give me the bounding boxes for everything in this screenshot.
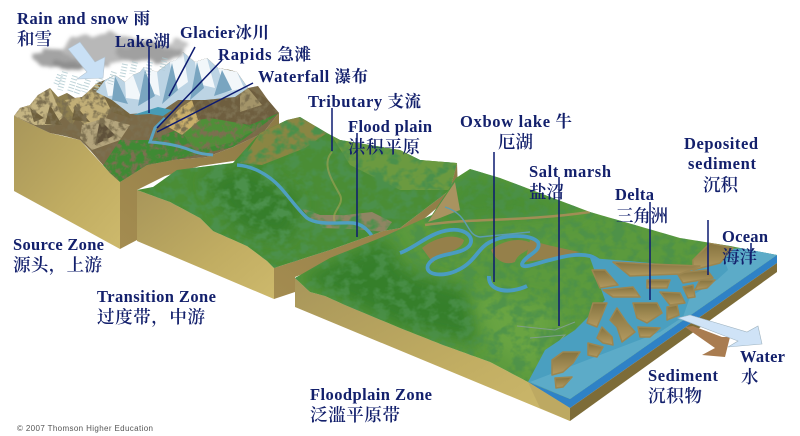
label: floodplain zone bbox=[310, 385, 432, 425]
label: source zone: 源头，上游 bbox=[13, 255, 102, 276]
tan and dark right mountains bbox=[165, 88, 279, 135]
label: oxbow lake: Oxbow lake 牛 bbox=[460, 112, 572, 131]
label: sediment bbox=[648, 366, 718, 406]
label: rain and snow: 和雪 bbox=[17, 29, 52, 49]
label: water: 水 bbox=[741, 367, 759, 387]
transition zone terrain bbox=[137, 117, 457, 268]
block: transition zone bbox=[130, 110, 470, 299]
ocean bbox=[530, 248, 777, 399]
label: source zone: Source Zone bbox=[13, 235, 104, 254]
leader lines bbox=[149, 47, 751, 326]
label: sediment: Sediment bbox=[648, 366, 718, 385]
snow peaks bbox=[96, 52, 248, 114]
label: floodplain zone: Floodplain Zone bbox=[310, 385, 432, 404]
label: tributary: Tributary 支流 bbox=[308, 91, 422, 111]
green valley bbox=[100, 112, 279, 182]
label: ocean bbox=[722, 227, 768, 267]
source zone terrain bbox=[14, 52, 279, 182]
copyright: © 2007 Thomson Higher Education bbox=[17, 424, 153, 433]
lake bbox=[133, 107, 172, 116]
label: rain and snow: Rain and snow 雨 bbox=[17, 9, 150, 28]
source stream bbox=[150, 118, 213, 155]
label: source zone bbox=[13, 235, 104, 276]
meandering river bbox=[400, 230, 606, 274]
floodplain terrain bbox=[295, 169, 777, 399]
label: transition zone bbox=[97, 287, 216, 328]
label: ocean: Ocean bbox=[722, 227, 768, 246]
label: salt marsh bbox=[529, 162, 611, 202]
label: transition zone: 过度带，中游 bbox=[97, 307, 206, 328]
label: deposited sediment bbox=[684, 134, 758, 195]
rain and snow bbox=[56, 58, 165, 95]
block: floodplain zone bbox=[290, 160, 790, 421]
label: waterfall: Waterfall 瀑布 bbox=[258, 67, 368, 86]
label: deposited sediment: Deposited bbox=[684, 134, 758, 153]
label: salt marsh: 盐沼 bbox=[529, 182, 564, 202]
tributary stream bbox=[445, 207, 530, 237]
label: delta bbox=[615, 185, 668, 226]
label: rapids: Rapids 急滩 bbox=[218, 45, 312, 64]
delta water bbox=[528, 248, 777, 399]
label: delta: 三角洲 bbox=[616, 206, 668, 226]
meander sediment bars bbox=[422, 237, 580, 263]
arrow: sediment bbox=[685, 326, 730, 357]
label: oxbow lake: 厄湖 bbox=[498, 132, 533, 152]
label: sediment: 沉积物 bbox=[648, 386, 702, 406]
arrow: precipitation bbox=[68, 42, 105, 79]
label: flood plain: Flood plain bbox=[348, 117, 432, 136]
floodplain front soil face bbox=[295, 278, 570, 421]
label: deposited sediment: 沉积 bbox=[703, 175, 739, 195]
ocean edge layers bbox=[528, 255, 777, 421]
label: deposited sediment: sediment bbox=[688, 154, 756, 173]
label: salt marsh: Salt marsh bbox=[529, 162, 611, 181]
salt marsh streams bbox=[517, 322, 576, 340]
label: delta: Delta bbox=[615, 185, 654, 204]
label: rain and snow bbox=[17, 9, 150, 49]
label: glacier: Glacier冰川 bbox=[180, 23, 269, 42]
arrow: water bbox=[678, 315, 762, 347]
delta islands bbox=[552, 243, 733, 388]
label: ocean: 海洋 bbox=[722, 247, 757, 267]
transition river bbox=[237, 165, 372, 236]
label: floodplain zone: 泛滥平原带 bbox=[310, 405, 400, 425]
label: water: Water bbox=[740, 347, 785, 366]
storm cloud bbox=[34, 34, 189, 71]
label: water bbox=[740, 347, 785, 387]
block: source zone bbox=[14, 52, 279, 249]
label: flood plain: 洪积平原 bbox=[348, 137, 420, 157]
source zone soil faces bbox=[14, 113, 279, 249]
oxbow lake bbox=[489, 276, 527, 291]
transition zone soil faces bbox=[137, 163, 458, 299]
tan left mountains bbox=[14, 83, 130, 150]
label: transition zone: Transition Zone bbox=[97, 287, 216, 306]
label: flood plain bbox=[348, 117, 432, 157]
label: oxbow lake bbox=[460, 112, 572, 152]
label: lake: Lake湖 bbox=[115, 32, 170, 51]
